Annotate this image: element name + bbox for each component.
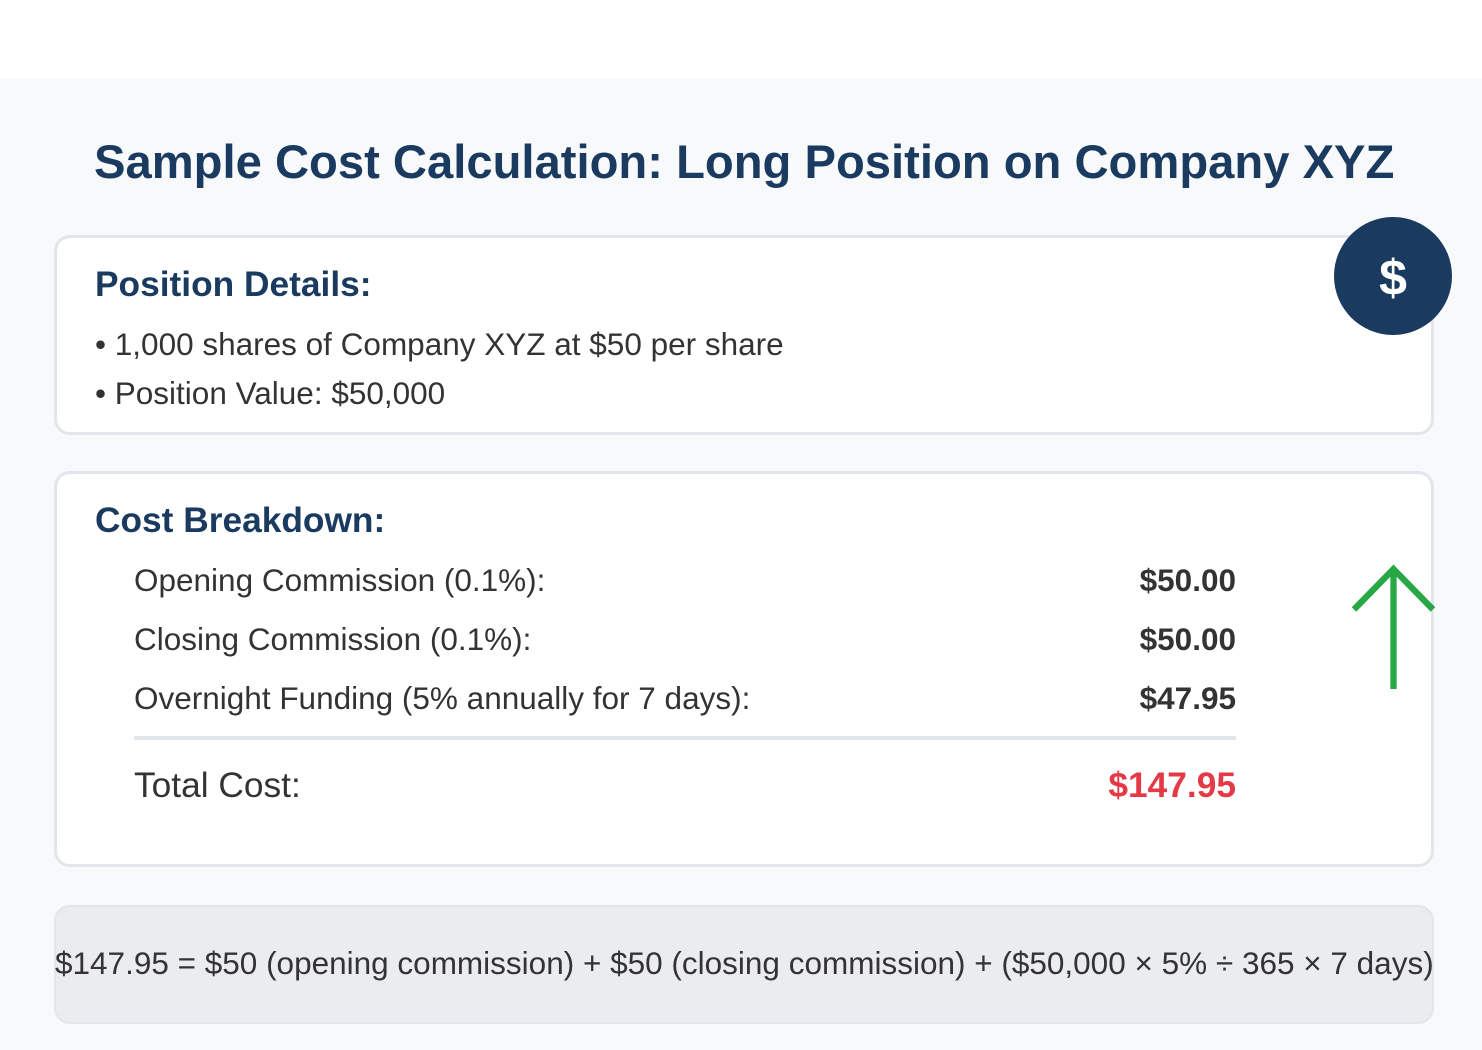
label: closing commission: Closing Commission (0.1%):: [134, 621, 531, 657]
heading: position details: Position Details:: [95, 265, 372, 304]
icon: dollar badge: $: [1379, 250, 1407, 306]
value: opening commission: $50.00: [1140, 562, 1236, 598]
title: Sample Cost Calculation: Long Position on Company XYZ: [94, 136, 1394, 189]
panel: formula: [54, 905, 1434, 1024]
text: shares: • 1,000 shares of Company XYZ at $50 per share: [95, 326, 784, 362]
panel: position details: [54, 235, 1434, 435]
label: opening commission: Opening Commission (0.1%):: [134, 562, 545, 598]
value: overnight funding: $47.95: [1140, 680, 1236, 716]
total divider: [134, 736, 1236, 740]
icon: green up arrow: [1352, 564, 1436, 689]
text: formula: $147.95 = $50 (opening commission) + $50 (closing commission) + ($50,000 × 5% ÷ 365 × 7 days): [55, 945, 1434, 981]
text: position value: • Position Value: $50,000: [95, 375, 445, 411]
panel: cost breakdown: [54, 471, 1434, 867]
label: total cost: Total Cost:: [134, 766, 301, 805]
heading: cost breakdown: Cost Breakdown:: [95, 501, 385, 540]
value: total cost: $147.95: [1108, 766, 1236, 805]
label: overnight funding: Overnight Funding (5% annually for 7 days):: [134, 680, 750, 716]
value: closing commission: $50.00: [1140, 621, 1236, 657]
icon: dollar badge: [1334, 217, 1452, 335]
